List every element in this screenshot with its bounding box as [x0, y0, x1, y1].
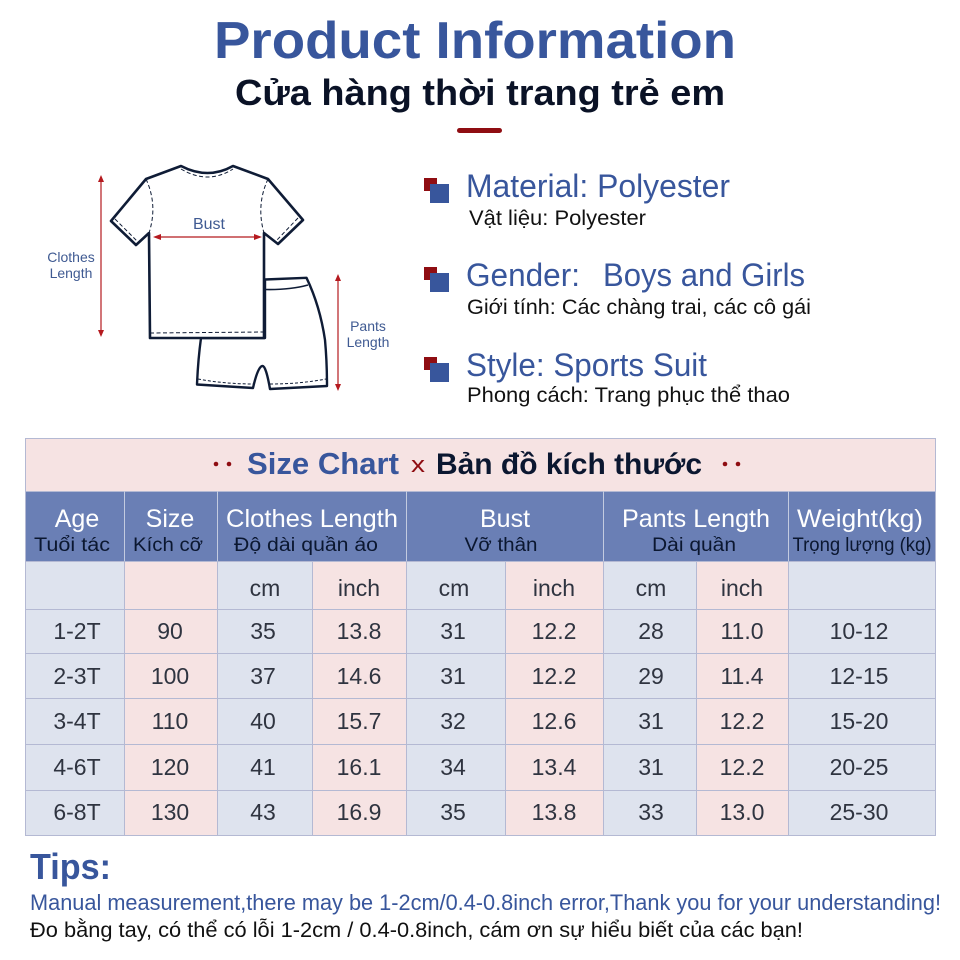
row 4-6T: 41 — [250, 754, 276, 780]
feature: gender: Giới tính: Các chàng trai, các cô gái — [467, 296, 811, 319]
row 6-8T: 130 — [151, 799, 189, 825]
row 4-6T: 13.4 — [532, 754, 577, 780]
row 6-8T: 16.9 — [337, 799, 381, 825]
feature: gender: Gender: — [466, 257, 580, 293]
feature: material: Material: Polyester — [466, 168, 730, 204]
row 1-2T: 28 — [638, 618, 664, 644]
row 4-6T: 20-25 — [830, 754, 888, 780]
units row: inch — [338, 575, 380, 601]
feature: material — [424, 168, 730, 230]
table header row: Age — [55, 505, 99, 533]
table banner: x — [411, 452, 425, 477]
row 2-3T: 100 — [151, 663, 189, 689]
row 1-2T: 13.8 — [337, 618, 381, 644]
row 6-8T — [53, 799, 888, 825]
size chart table — [25, 438, 936, 836]
table header row: Pants Length — [622, 505, 770, 533]
row 2-3T: 2-3T — [53, 663, 101, 689]
row 3-4T: 31 — [638, 708, 664, 734]
row 3-4T — [53, 708, 888, 734]
units row: inch — [533, 575, 575, 601]
feature: material: Vật liệu: Polyester — [469, 207, 646, 230]
row 6-8T: 25-30 — [830, 799, 888, 825]
row 1-2T: 35 — [250, 618, 276, 644]
row 2-3T — [53, 663, 888, 689]
row 3-4T: 32 — [440, 708, 466, 734]
row 4-6T: 16.1 — [337, 754, 381, 780]
table body backgrounds — [25, 561, 935, 835]
label: bust: Bust — [193, 216, 226, 233]
row 6-8T: 13.8 — [532, 799, 576, 825]
tips text vietnamese: Đo bằng tay, có thể có lỗi 1-2cm / 0.4-0.8inch, cám ơn sự hiểu biết của các bạn! — [30, 919, 803, 942]
table header row: Tuổi tác — [34, 535, 110, 556]
icon: t-shirt — [111, 166, 303, 338]
label: pants length: Pants — [350, 318, 386, 334]
table header row: Bust — [480, 505, 530, 533]
row 6-8T: 35 — [440, 799, 466, 825]
row 4-6T: 4-6T — [53, 754, 101, 780]
units row: cm — [250, 575, 280, 601]
row 3-4T: 15.7 — [337, 708, 381, 734]
feature: style — [424, 347, 790, 407]
row 6-8T: 43 — [250, 799, 276, 825]
row 2-3T: 12.2 — [532, 663, 576, 689]
icon: squares — [424, 267, 449, 292]
row 4-6T — [53, 754, 888, 780]
label: clothes length: Length — [50, 265, 92, 281]
row 4-6T: 120 — [151, 754, 189, 780]
table header row: Dài quần — [652, 535, 736, 556]
row 3-4T: 15-20 — [830, 708, 888, 734]
row 4-6T: 34 — [440, 754, 466, 780]
feature: style: Phong cách: Trang phục thể thao — [467, 384, 790, 407]
table header row: Weight(kg) — [797, 505, 923, 533]
row 2-3T: 14.6 — [337, 663, 381, 689]
row 6-8T: 33 — [638, 799, 664, 825]
row 6-8T: 6-8T — [53, 799, 101, 825]
tips text english: Manual measurement,there may be 1-2cm/0.4-0.8inch error,Thank you for your understanding! — [30, 890, 941, 915]
icon: squares — [424, 357, 449, 382]
title accent bar — [457, 128, 502, 133]
table header row: Vỡ thân — [464, 535, 538, 556]
icon: shorts — [197, 278, 327, 389]
row 3-4T: 110 — [152, 708, 188, 734]
row 4-6T: 31 — [638, 754, 664, 780]
row 2-3T: 11.4 — [720, 663, 764, 689]
feature: style: Style: Sports Suit — [466, 347, 707, 383]
row 3-4T: 12.2 — [720, 708, 764, 734]
table header row: Kích cỡ — [133, 535, 203, 556]
table header row: Size — [146, 505, 194, 533]
garment measurement diagram — [47, 166, 389, 391]
arrow: clothes length — [98, 175, 104, 337]
row 1-2T: 12.2 — [532, 618, 576, 644]
row 1-2T: 31 — [440, 618, 466, 644]
row 3-4T: 3-4T — [53, 708, 101, 734]
row 2-3T: 29 — [638, 663, 664, 689]
table header row: Trọng lượng (kg) — [792, 535, 932, 556]
label: pants length: Length — [347, 334, 389, 350]
row 2-3T: 12-15 — [830, 663, 888, 689]
row 1-2T: 11.0 — [720, 618, 764, 644]
row 3-4T: 12.6 — [532, 708, 576, 734]
table banner: Bản đồ kích thước — [436, 448, 702, 481]
label: clothes length: Clothes — [47, 249, 95, 265]
units row: cm — [439, 575, 469, 601]
table header row: Độ dài quần áo — [234, 535, 378, 556]
table header row: Clothes Length — [226, 505, 398, 533]
row 4-6T: 12.2 — [720, 754, 764, 780]
feature: gender — [424, 257, 811, 319]
row 3-4T: 40 — [250, 708, 276, 734]
units row: cm — [636, 575, 666, 601]
table banner — [25, 438, 935, 491]
table banner: Size Chart — [247, 446, 399, 481]
icon: squares — [424, 178, 449, 203]
row 6-8T: 13.0 — [720, 799, 764, 825]
row 2-3T: 37 — [250, 663, 276, 689]
units row — [250, 575, 763, 601]
arrow: pants length — [335, 274, 341, 391]
title: Product Information — [214, 12, 736, 70]
row 1-2T: 90 — [157, 618, 183, 644]
subtitle: Cửa hàng thời trang trẻ em — [235, 72, 725, 113]
row 1-2T: 10-12 — [830, 618, 888, 644]
tips heading: Tips: — [30, 846, 111, 887]
arrow: bust — [153, 234, 262, 240]
feature: gender: Boys and Girls — [603, 257, 805, 293]
row 2-3T: 31 — [440, 663, 466, 689]
table header row — [25, 491, 935, 561]
row 1-2T — [53, 618, 888, 644]
units row: inch — [721, 575, 763, 601]
row 1-2T: 1-2T — [53, 618, 101, 644]
